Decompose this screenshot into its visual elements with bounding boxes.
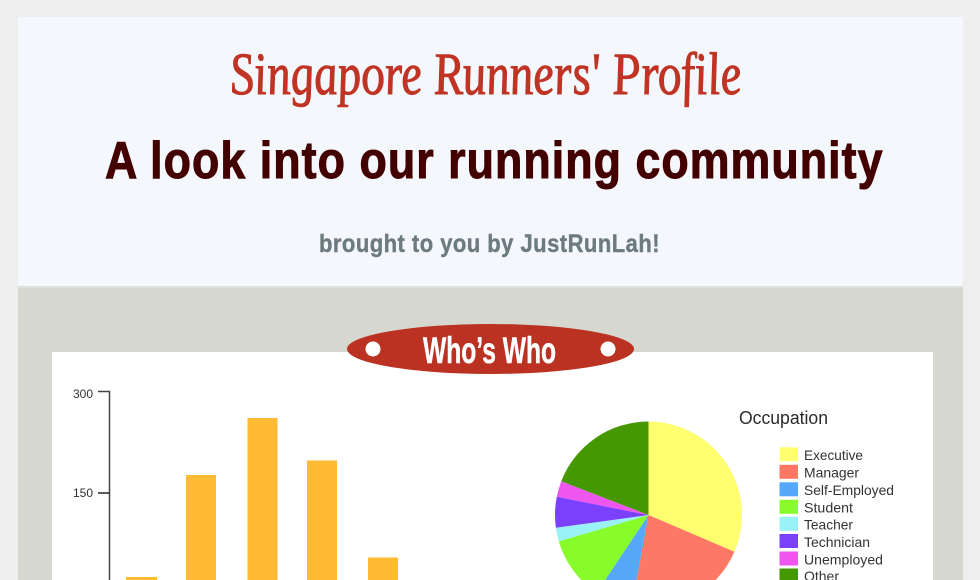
panel: header bbox=[18, 17, 963, 286]
legend: occupation: Self-Employed bbox=[804, 482, 894, 498]
title: Singapore Runners' Profile bbox=[226, 41, 744, 108]
subtitle: A look into our running community bbox=[105, 132, 882, 190]
legend: occupation: Technician bbox=[804, 534, 870, 550]
bars bbox=[126, 418, 398, 580]
legend: occupation: Student bbox=[804, 500, 853, 516]
y axis bbox=[73, 387, 110, 580]
y axis: 150 bbox=[73, 486, 93, 500]
legend: occupation bbox=[739, 408, 894, 580]
y axis: 300 bbox=[73, 387, 93, 401]
panel: who's who section bbox=[18, 286, 963, 580]
byline: brought to you by JustRunLah! bbox=[319, 230, 660, 257]
legend: occupation: Manager bbox=[804, 464, 859, 480]
pie chart: occupation bbox=[555, 422, 742, 580]
legend: occupation: Executive bbox=[804, 447, 863, 463]
bar chart bbox=[73, 387, 398, 580]
legend: occupation: Teacher bbox=[804, 516, 853, 532]
section badge: Who's Who: Who’s Who bbox=[423, 330, 556, 371]
legend: occupation: Occupation bbox=[739, 408, 828, 428]
legend: occupation: Unemployed bbox=[804, 552, 883, 568]
section badge: Who's Who bbox=[347, 324, 634, 374]
